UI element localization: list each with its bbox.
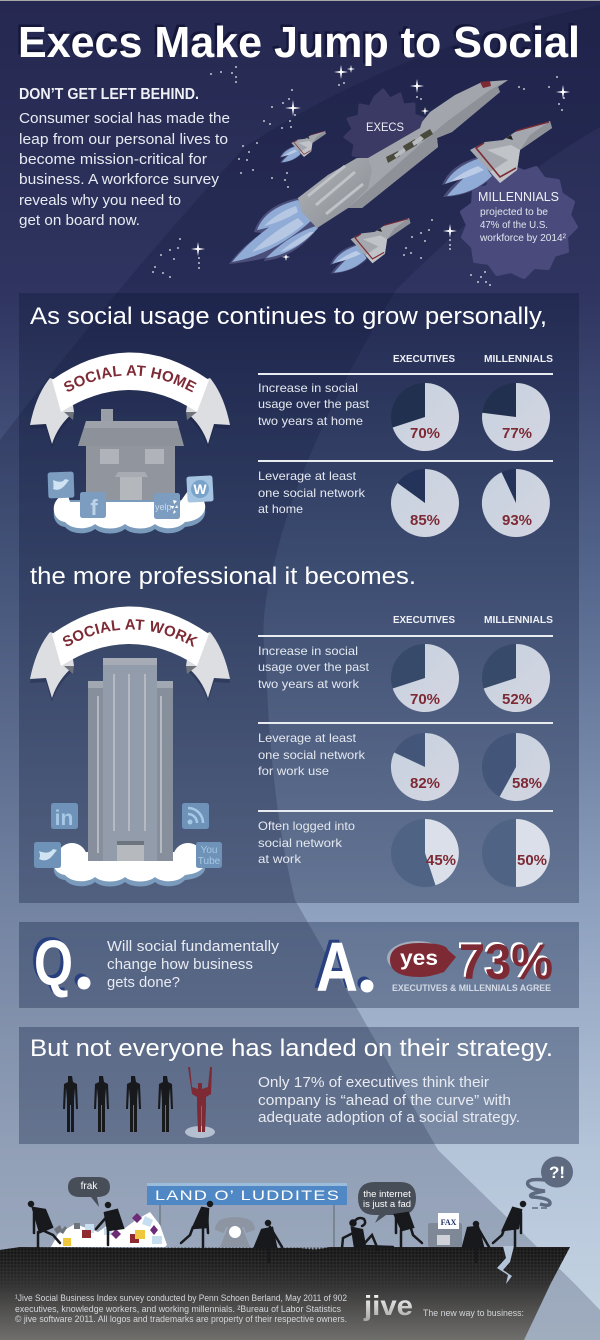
intro text: business. A workforce survey [19, 172, 220, 188]
icon: rss [182, 803, 209, 829]
row label: often logged in: social network [258, 836, 343, 850]
row label: often logged in [258, 819, 355, 866]
pie: executives 85%: 85% [410, 512, 440, 529]
pile of social icons [51, 1212, 167, 1247]
stars [153, 65, 570, 285]
row label: leverage for work: one social network [258, 748, 366, 762]
row label: leverage at home [258, 469, 366, 516]
strategy text: adequate adoption of a social strategy. [258, 1110, 520, 1126]
row label: increase at home: usage over the past [258, 397, 370, 411]
badge: execs [345, 90, 427, 170]
pie: millennials 52%: 52% [502, 691, 532, 708]
intro text: get on board now. [19, 213, 140, 229]
icon: yelp: yelp [155, 502, 172, 512]
row label: often logged in: Often logged into [258, 819, 355, 833]
thought bubble: ?!: ?! [549, 1163, 565, 1182]
speech bubble: frak [68, 1177, 110, 1207]
banner: social at work [30, 606, 230, 702]
speech bubble: frak: frak [81, 1181, 98, 1192]
banner: social at work: SOCIAL AT WORK [62, 619, 198, 648]
illustration: land o' luddites [0, 1156, 573, 1340]
intro text: Consumer social has made the [19, 111, 230, 127]
icon: office building [88, 658, 173, 861]
row label: increase at home [258, 381, 370, 428]
row label: leverage for work [258, 731, 366, 778]
icon: fax machine [428, 1213, 462, 1247]
badge: execs: EXECS [366, 120, 404, 134]
question text: Will social fundamentally [107, 939, 280, 955]
intro text: reveals why you need to [19, 193, 181, 209]
footer: sources: executives, knowledge workers, and working millennials. ²Bureau of Labor Statistics [15, 1304, 341, 1315]
stat: 73%: 73% [459, 934, 553, 990]
icon: linkedin: in [55, 807, 73, 830]
header: title and intro [16, 16, 580, 229]
banner: social at home: SOCIAL AT HOME [64, 365, 197, 392]
footer: sources: ¹Jive Social Business Index survey conducted by Penn Schoen Berland, May 2011 of 902 [15, 1293, 347, 1304]
rocket: main execs ship [229, 80, 508, 264]
speech bubble: the internet is just a fad [358, 1182, 416, 1223]
strategy text: company is “ahead of the curve” with [258, 1093, 511, 1109]
badge: millennials: 47% of the U.S. [480, 219, 548, 231]
question text: change how business [107, 957, 253, 973]
pie: executives 45% [391, 819, 459, 887]
sign: land o' luddites [147, 1183, 347, 1247]
column headers: EXECUTIVES [393, 354, 455, 365]
illustration: social at work [30, 606, 230, 886]
icon: wordpress [186, 475, 214, 503]
icon: cloud [54, 488, 205, 534]
pie: executives 70%: 70% [410, 425, 440, 442]
ground [0, 1246, 570, 1340]
pie: executives 82% [391, 733, 459, 801]
people: luddites [29, 1202, 525, 1262]
row label: leverage at home: at home [258, 502, 303, 516]
column headers [393, 615, 553, 626]
heading: personally: As social usage continues to grow personally, [30, 303, 547, 330]
column headers: EXECUTIVES [393, 615, 455, 626]
speech bubble: the internet is just a fad: the internet [363, 1189, 411, 1200]
row label: increase at work: usage over the past [258, 660, 370, 674]
pie: executives 45%: 45% [426, 852, 456, 869]
table: work [258, 615, 553, 887]
strategy text [258, 1075, 520, 1126]
pie: executives 85% [391, 469, 459, 537]
icon: cloud [54, 843, 205, 886]
letter A: A [313, 925, 355, 1003]
badge: millennials: projected to be [480, 206, 548, 218]
rocket: small upper ship [280, 131, 326, 163]
pie: millennials 50% [482, 819, 550, 887]
badge: millennials: workforce by 2014² [479, 232, 566, 244]
icon: wordpress: W [193, 481, 207, 497]
letter Q: Q [34, 927, 73, 999]
strategy text: Only 17% of executives think their [258, 1075, 489, 1091]
heading: But not everyone has landed on their strategy. [30, 1035, 553, 1062]
question text: gets done? [107, 975, 180, 991]
pie: millennials 52% [482, 644, 550, 712]
question text [107, 939, 280, 991]
icon: twitter [34, 842, 61, 868]
row label: leverage at home: Leverage at least [258, 469, 357, 483]
pie: millennials 58%: 58% [512, 775, 542, 792]
pie: millennials 93% [482, 469, 550, 537]
pie: executives 70% [391, 383, 459, 451]
subheading: DON’T GET LEFT BEHIND. [19, 86, 199, 103]
rocket: lower millennial ship [330, 218, 410, 274]
speech bubble: the internet is just a fad: is just a fad [363, 1199, 411, 1210]
title: Execs Make Jump to Social [16, 16, 578, 64]
panel: question and answer [19, 922, 579, 1008]
heading: professional: the more professional it becomes. [30, 563, 416, 590]
badge: millennials: MILLENNIALS [478, 189, 559, 204]
title: Execs Make Jump to Social [18, 18, 580, 67]
icon: telephone [215, 1217, 255, 1247]
badge: millennials [462, 166, 576, 277]
row label: increase at home: two years at home [258, 414, 363, 428]
speech bubble: yes [387, 941, 456, 977]
panel: social at home and work [19, 293, 579, 903]
pie: executives 70%: 70% [410, 691, 440, 708]
icon: youtube: You [201, 845, 217, 856]
stat: 73%: 73% [457, 932, 551, 988]
row label: increase at work [258, 644, 370, 691]
pie: millennials 50%: 50% [517, 852, 547, 869]
icon: house [78, 409, 184, 506]
pie: millennials 77%: 77% [502, 425, 532, 442]
pie: millennials 93%: 93% [502, 512, 532, 529]
column headers: MILLENNIALS [484, 354, 553, 365]
footer: sources: © jive software 2011. All logos and trademarks are property of their respective owners. [15, 1314, 347, 1325]
icon: youtube: Tube [198, 856, 221, 867]
icon: linkedin [51, 803, 78, 830]
row label: leverage for work: for work use [258, 764, 329, 778]
logo: jive: The new way to business: [423, 1308, 524, 1319]
person: red executive with raised arms [185, 1067, 215, 1138]
logo: jive [363, 1290, 524, 1321]
rocket: right millennial ship [442, 121, 552, 197]
icon: youtube [196, 842, 222, 868]
illustration: social at home [30, 352, 230, 534]
table: home [258, 354, 553, 537]
pie: executives 82%: 82% [410, 775, 440, 792]
panel: strategy [19, 1027, 579, 1144]
row label: leverage at home: one social network [258, 486, 366, 500]
pie: millennials 77% [482, 383, 550, 451]
icon: facebook [80, 492, 106, 520]
pie: executives 70% [391, 644, 459, 712]
icon: fax machine: FAX [441, 1218, 457, 1227]
row label: leverage for work: Leverage at least [258, 731, 357, 745]
icon: yelp [154, 493, 180, 519]
speech bubble: yes: yes [400, 947, 438, 970]
column headers: MILLENNIALS [484, 615, 553, 626]
sign: land o' luddites: LAND O’ LUDDITES [155, 1187, 340, 1203]
caption: EXECUTIVES & MILLENNIALS AGREE [392, 983, 551, 993]
row label: increase at home: Increase in social [258, 381, 358, 395]
row label: increase at work: two years at work [258, 677, 360, 691]
thought bubble: ?! [528, 1156, 573, 1208]
letter A: A [316, 928, 358, 1006]
footer: sources [15, 1293, 347, 1325]
icon: facebook: f [90, 495, 98, 520]
column headers [393, 354, 553, 365]
logo: jive: jive [363, 1290, 413, 1321]
banner: social at home [30, 352, 230, 447]
people: four dark executives [63, 1076, 173, 1132]
intro text [19, 111, 230, 229]
intro text: leap from our personal lives to [19, 132, 228, 148]
intro text: become mission-critical for [19, 152, 207, 168]
letter Q: Q [31, 924, 70, 996]
row label: increase at work: Increase in social [258, 644, 358, 658]
icon: twitter [48, 472, 74, 498]
pie: millennials 58% [482, 733, 550, 801]
row label: often logged in: at work [258, 852, 302, 866]
